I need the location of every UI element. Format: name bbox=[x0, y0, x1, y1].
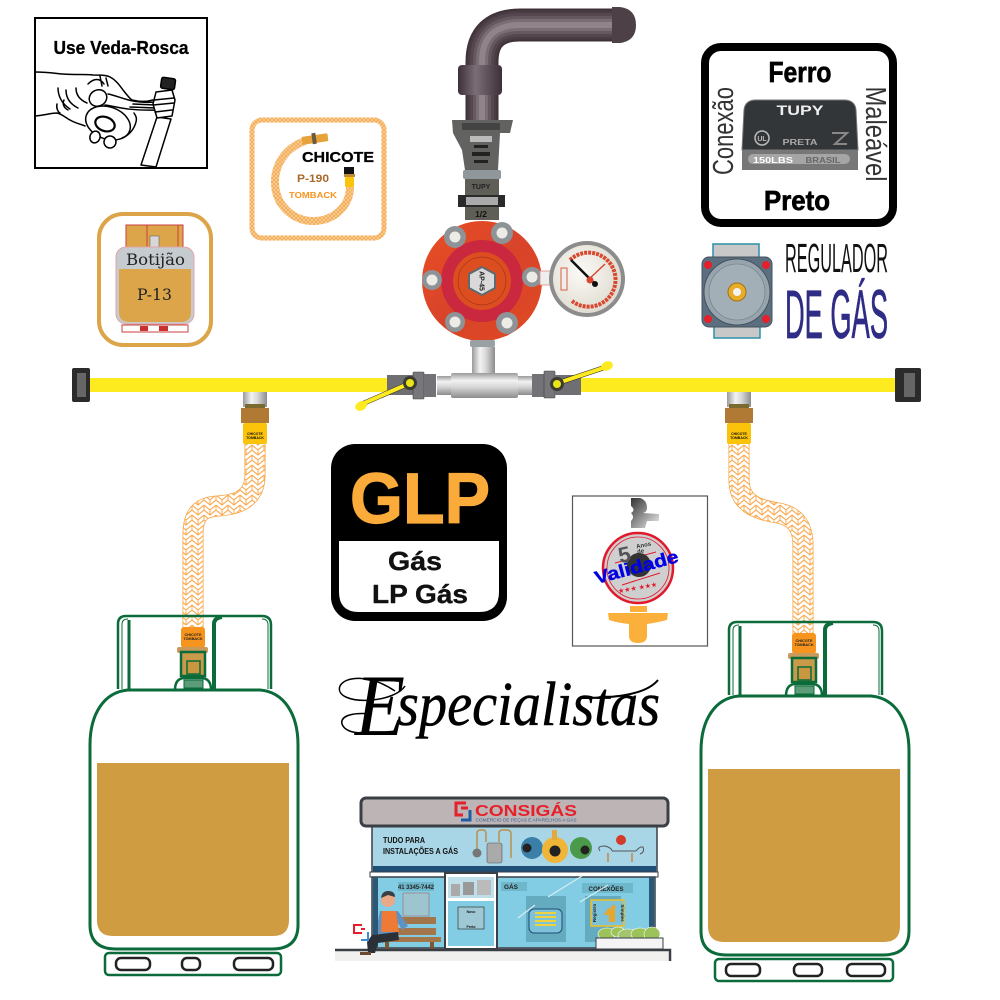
text: tudo para instalações a gás bbox=[383, 836, 459, 856]
shop windows: GÁS bbox=[504, 884, 518, 891]
panel: chicote P-190 bbox=[252, 120, 384, 238]
yellow gas pipe bbox=[88, 378, 898, 392]
icon: collar bbox=[126, 225, 183, 249]
icon: three regulators bbox=[521, 830, 592, 863]
text: maleável: Maleável bbox=[859, 86, 891, 182]
text: botijão: Botijão bbox=[126, 250, 185, 269]
icon: coiled hose bbox=[275, 133, 355, 221]
right hose assembly: CHICOTE bbox=[731, 432, 748, 436]
icon: pressure gauge bbox=[540, 241, 625, 317]
shop upper panel bbox=[372, 826, 657, 873]
icon: black union fitting: 1/2 bbox=[475, 209, 487, 219]
liquid gas level bbox=[708, 769, 900, 942]
icon: tupy fitting: TUPY bbox=[776, 102, 824, 118]
shop windows bbox=[372, 876, 655, 948]
icon: tupy fitting: BRASIL bbox=[806, 156, 841, 165]
icon: validity stamp: de bbox=[637, 548, 645, 556]
tank body bbox=[90, 690, 298, 949]
text: validade: Validade bbox=[592, 546, 681, 588]
icon: left ball valve bbox=[354, 372, 436, 413]
icon: tupy fitting: 150LBS bbox=[753, 156, 794, 165]
icon: black union fitting bbox=[452, 120, 513, 220]
icon: hand wrapping tape on pipe bbox=[35, 72, 176, 167]
text: tomback: TOMBACK bbox=[289, 190, 338, 200]
tank base bbox=[715, 959, 893, 981]
icon: small installation set bbox=[599, 835, 644, 862]
icon: validity stamp: Anos bbox=[636, 541, 652, 551]
text: preto: Preto bbox=[764, 185, 830, 216]
icon: validity stamp: ★★★ ★★★ bbox=[617, 581, 658, 595]
shop windows: 41 3345-7442 bbox=[398, 885, 435, 891]
shop roof sign: COMÉRCIO DE PEÇAS E APARELHOS A GÁS bbox=[476, 816, 576, 822]
tank body bbox=[701, 696, 909, 955]
collar bbox=[729, 622, 882, 695]
panel: use veda-rosca bbox=[35, 18, 207, 168]
panel: validade 5 anos bbox=[572, 496, 708, 646]
text: GLP: GLP bbox=[350, 460, 490, 539]
left hose assembly: CHICOTE bbox=[247, 432, 264, 436]
right hose assembly: TOMBACK bbox=[730, 436, 748, 440]
heading: especialistas: E bbox=[353, 658, 405, 755]
heading: especialistas bbox=[339, 658, 660, 755]
shop door: Novo bbox=[467, 910, 475, 914]
text: tudo para instalações a gás: INSTALAÇÕES A GÁS bbox=[383, 847, 459, 856]
collar bbox=[118, 616, 271, 689]
icon: top elbow pipe bbox=[458, 7, 636, 125]
bench bbox=[382, 917, 441, 949]
text: chicote: CHICOTE bbox=[302, 149, 374, 166]
ground bbox=[335, 950, 670, 961]
valve fitting: CHICOTE bbox=[795, 639, 813, 643]
icon: orange T seal bbox=[608, 606, 668, 643]
shop door: Preto bbox=[467, 925, 475, 929]
right hose assembly bbox=[725, 392, 803, 636]
ledge bbox=[370, 872, 658, 877]
valve fitting bbox=[786, 633, 822, 696]
panel: botijão P-13 bbox=[99, 214, 211, 345]
icon: right ball valve bbox=[532, 360, 614, 398]
icon: tupy fitting bbox=[742, 100, 858, 170]
icon: red gas regulator: AP-45 bbox=[478, 271, 484, 291]
text: P-190: P-190 bbox=[297, 173, 329, 185]
left hose assembly bbox=[193, 392, 269, 630]
tank base bbox=[105, 953, 281, 975]
icon: grey seal fragment bbox=[631, 498, 659, 528]
shop door bbox=[445, 873, 497, 949]
icon: black union fitting: TUPY bbox=[472, 184, 491, 191]
right gas cylinder bbox=[701, 622, 909, 981]
heading: especialistas: specialistas bbox=[397, 671, 660, 739]
icon: red gas regulator bbox=[422, 221, 542, 341]
left hose assembly: TOMBACK bbox=[246, 436, 264, 440]
shop windows: Registro bbox=[592, 904, 597, 922]
text: conexão: Conexão bbox=[708, 87, 740, 175]
text: LP gás: LP Gás bbox=[372, 579, 468, 609]
shop roof sign bbox=[361, 798, 668, 826]
valve fitting: TOMBACK bbox=[794, 643, 814, 647]
icon: validity stamp bbox=[603, 533, 673, 603]
text: tudo para instalações a gás: TUDO PARA bbox=[383, 836, 425, 845]
icon: tupy fitting: PRETA bbox=[782, 138, 818, 147]
text: P-13: P-13 bbox=[137, 285, 172, 304]
panel: GLP badge bbox=[331, 444, 507, 621]
icon: regulator front view bbox=[702, 244, 772, 338]
heading: use veda-rosca: Use Veda-Rosca bbox=[54, 38, 189, 58]
icon: validity stamp: 5 bbox=[616, 541, 633, 568]
valve fitting bbox=[175, 627, 211, 690]
icon: tupy fitting: UL bbox=[757, 136, 767, 143]
icon: silver tee fitting bbox=[437, 340, 532, 398]
storefront: consigás bbox=[335, 798, 670, 961]
icon: meter with hoses bbox=[472, 830, 511, 863]
text: ferro: Ferro bbox=[768, 57, 832, 89]
icon: cylinder body bbox=[116, 247, 194, 324]
panel: conexão ferro maleável preto bbox=[705, 47, 893, 223]
shop windows: Simples bbox=[620, 904, 625, 922]
left gas cylinder bbox=[90, 616, 298, 975]
planter bbox=[596, 927, 663, 949]
text: gás: Gás bbox=[388, 546, 442, 576]
shop windows: CONEXÕES bbox=[588, 886, 624, 893]
seated man bbox=[354, 891, 408, 955]
icon: cylinder base bbox=[122, 325, 188, 332]
icon: right pipe end fitting bbox=[895, 368, 921, 402]
valve fitting: CHICOTE bbox=[184, 633, 202, 637]
valve fitting: TOMBACK bbox=[183, 637, 203, 641]
shop roof sign: CONSIGÁS bbox=[475, 801, 577, 820]
icon: left pipe end fitting bbox=[72, 368, 90, 402]
liquid gas level bbox=[97, 763, 289, 936]
